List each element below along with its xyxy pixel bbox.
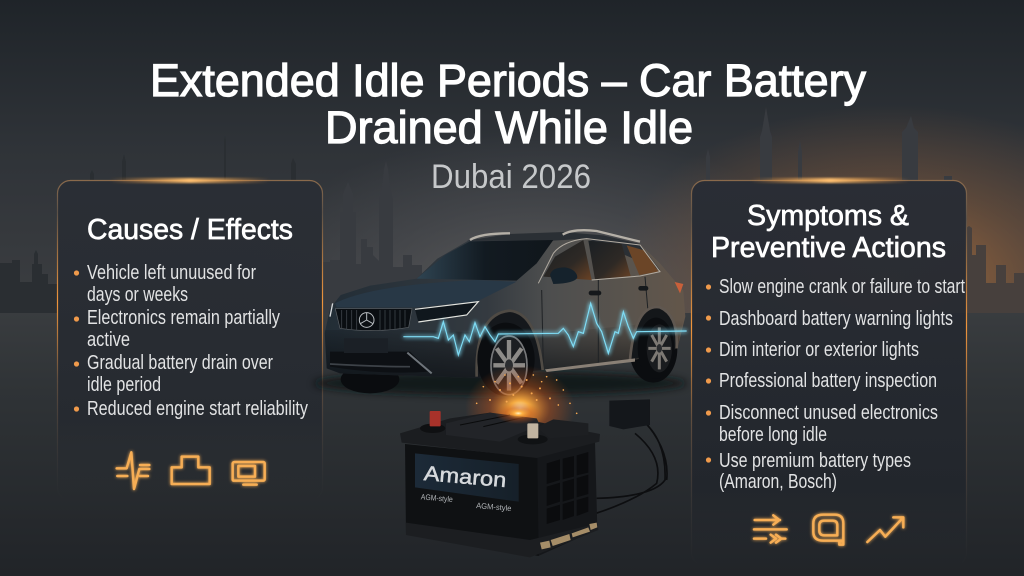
car body [325,232,685,378]
panel: causes / effects [58,178,322,500]
lid raised block [446,413,540,442]
rear wheel [638,318,674,379]
waveform [403,303,687,355]
heading: symptoms and preventive actions: Preventive Actions [711,232,946,264]
bullet list: symptoms and actions: before long idle [719,424,827,446]
battery label [415,453,519,502]
roof rails [470,230,640,242]
background: ground [0,313,1024,576]
panel: symptoms and preventive actions [692,178,966,566]
title: Extended Idle Periods – Car Battery [150,55,866,106]
bullet list: causes: Reduced engine start reliability [87,398,308,420]
icon: battery outline [172,457,210,484]
front wheel [477,323,535,396]
title [150,55,866,153]
background: central haze [240,130,840,470]
icon row: causes [117,452,265,489]
bullet list: symptoms and actions: Use premium battery types [719,450,911,472]
battery type labels [420,492,512,513]
battery right side [537,442,597,556]
bullet list: symptoms and actions: Disconnect unused electronics [719,402,938,424]
battery type labels: AGM-style [476,501,512,513]
bullet list: causes: days or weeks [87,284,188,306]
bullet list: causes [74,262,308,420]
charger cable [596,420,667,513]
heading: causes / effects: Causes / Effects [87,214,293,246]
heading: symptoms and preventive actions [711,200,946,264]
battery [400,365,667,557]
title: Drained While Idle [325,102,693,153]
battery front [405,444,539,556]
bullet list: causes: Vehicle left unuused for [87,262,256,284]
windshield [417,240,553,281]
bullet list: causes: idle period [87,374,161,396]
lower body shade [325,320,683,378]
window trim [538,239,660,283]
icon: pulse [117,452,149,489]
wheel arch front [477,311,543,377]
background: dusk sky [0,0,1024,330]
positive terminal [420,411,445,433]
rear wheel tyre [629,316,677,383]
background: warm horizon glow [610,105,1024,455]
bullet list: causes: Gradual battery drain over [87,352,273,374]
icon row: actions [754,515,903,545]
icon: rounded square [813,515,843,545]
icon: sliders [754,515,787,543]
negative terminal [518,423,548,444]
icon: rising arrow [867,517,903,542]
background: Dubai skyline [0,107,1024,345]
side mirror [550,267,577,284]
bullet list: symptoms and actions: Professional battery inspection [719,370,937,392]
front grille [335,309,412,331]
lower bumper [330,352,430,373]
hood highlight [335,280,517,307]
heading: symptoms and preventive actions: Symptoms & [747,200,909,232]
tail light [675,282,683,293]
bullet list: symptoms and actions: (Amaron, Bosch) [719,471,837,493]
sparks [476,374,577,414]
battery type labels: AGM-style [420,492,454,504]
subtitle: Dubai 2026 [431,158,591,196]
door lines and handles [542,277,648,367]
car shadow [313,371,687,395]
bullet list: symptoms and actions: Dim interior or exterior lights [719,339,919,361]
wheel arch rear [630,307,677,360]
bullet list: causes: Electronics remain partially [87,307,280,329]
battery base [406,523,598,557]
roof [467,232,660,270]
bullet list: causes: active [87,329,130,351]
side windows [543,240,592,280]
bullet list: symptoms and actions: Slow engine crank or failure to start [719,276,965,298]
brand name: Amaron [423,462,507,492]
top highlight from spark [495,403,542,424]
battery lid [400,413,600,458]
headlight [415,302,478,322]
badge [359,313,374,327]
icon: screen [233,462,265,485]
side skirt [545,358,635,372]
charger box [609,399,650,429]
bullet list: symptoms and actions: Dashboard battery warning lights [719,308,953,330]
spark glow [465,365,575,452]
side grid [547,452,588,524]
far front wheel [341,365,399,393]
bullet list: symptoms and actions [706,276,965,493]
car [313,230,687,396]
